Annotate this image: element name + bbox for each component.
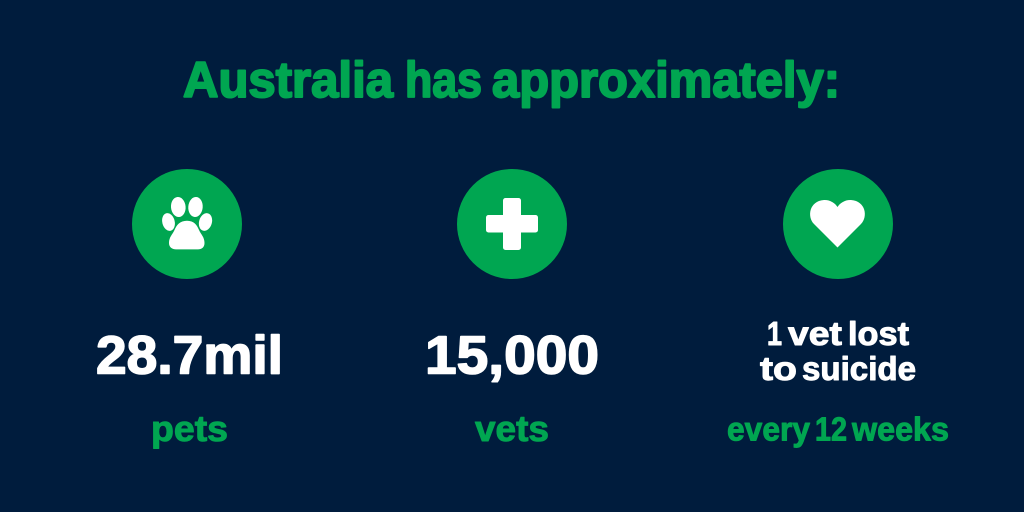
suicide figure: lost	[848, 315, 909, 352]
vets figure: 15,000	[425, 326, 599, 386]
panel: suicide	[727, 169, 949, 448]
suicide label: 12	[815, 410, 847, 448]
suicide figure: vet	[788, 315, 842, 352]
panel: vets	[425, 169, 599, 449]
icon: heart	[783, 169, 893, 279]
icon: paw print	[132, 169, 242, 279]
suicide label: weeks	[851, 410, 949, 448]
panel: pets	[96, 169, 283, 449]
suicide label: every	[727, 410, 811, 448]
title	[183, 52, 840, 108]
suicide figure: suicide	[802, 350, 916, 387]
title: Australia	[183, 52, 394, 108]
vets label: vets	[475, 408, 549, 449]
pets label: pets	[151, 408, 228, 449]
pets figure: 28.7mil	[96, 326, 283, 386]
suicide figure	[760, 315, 916, 387]
title: has	[405, 52, 482, 108]
suicide label	[727, 410, 949, 448]
suicide figure: 1	[767, 315, 782, 352]
title: approximately:	[492, 52, 840, 108]
suicide figure: to	[760, 350, 797, 387]
icon: medical cross	[457, 169, 567, 279]
